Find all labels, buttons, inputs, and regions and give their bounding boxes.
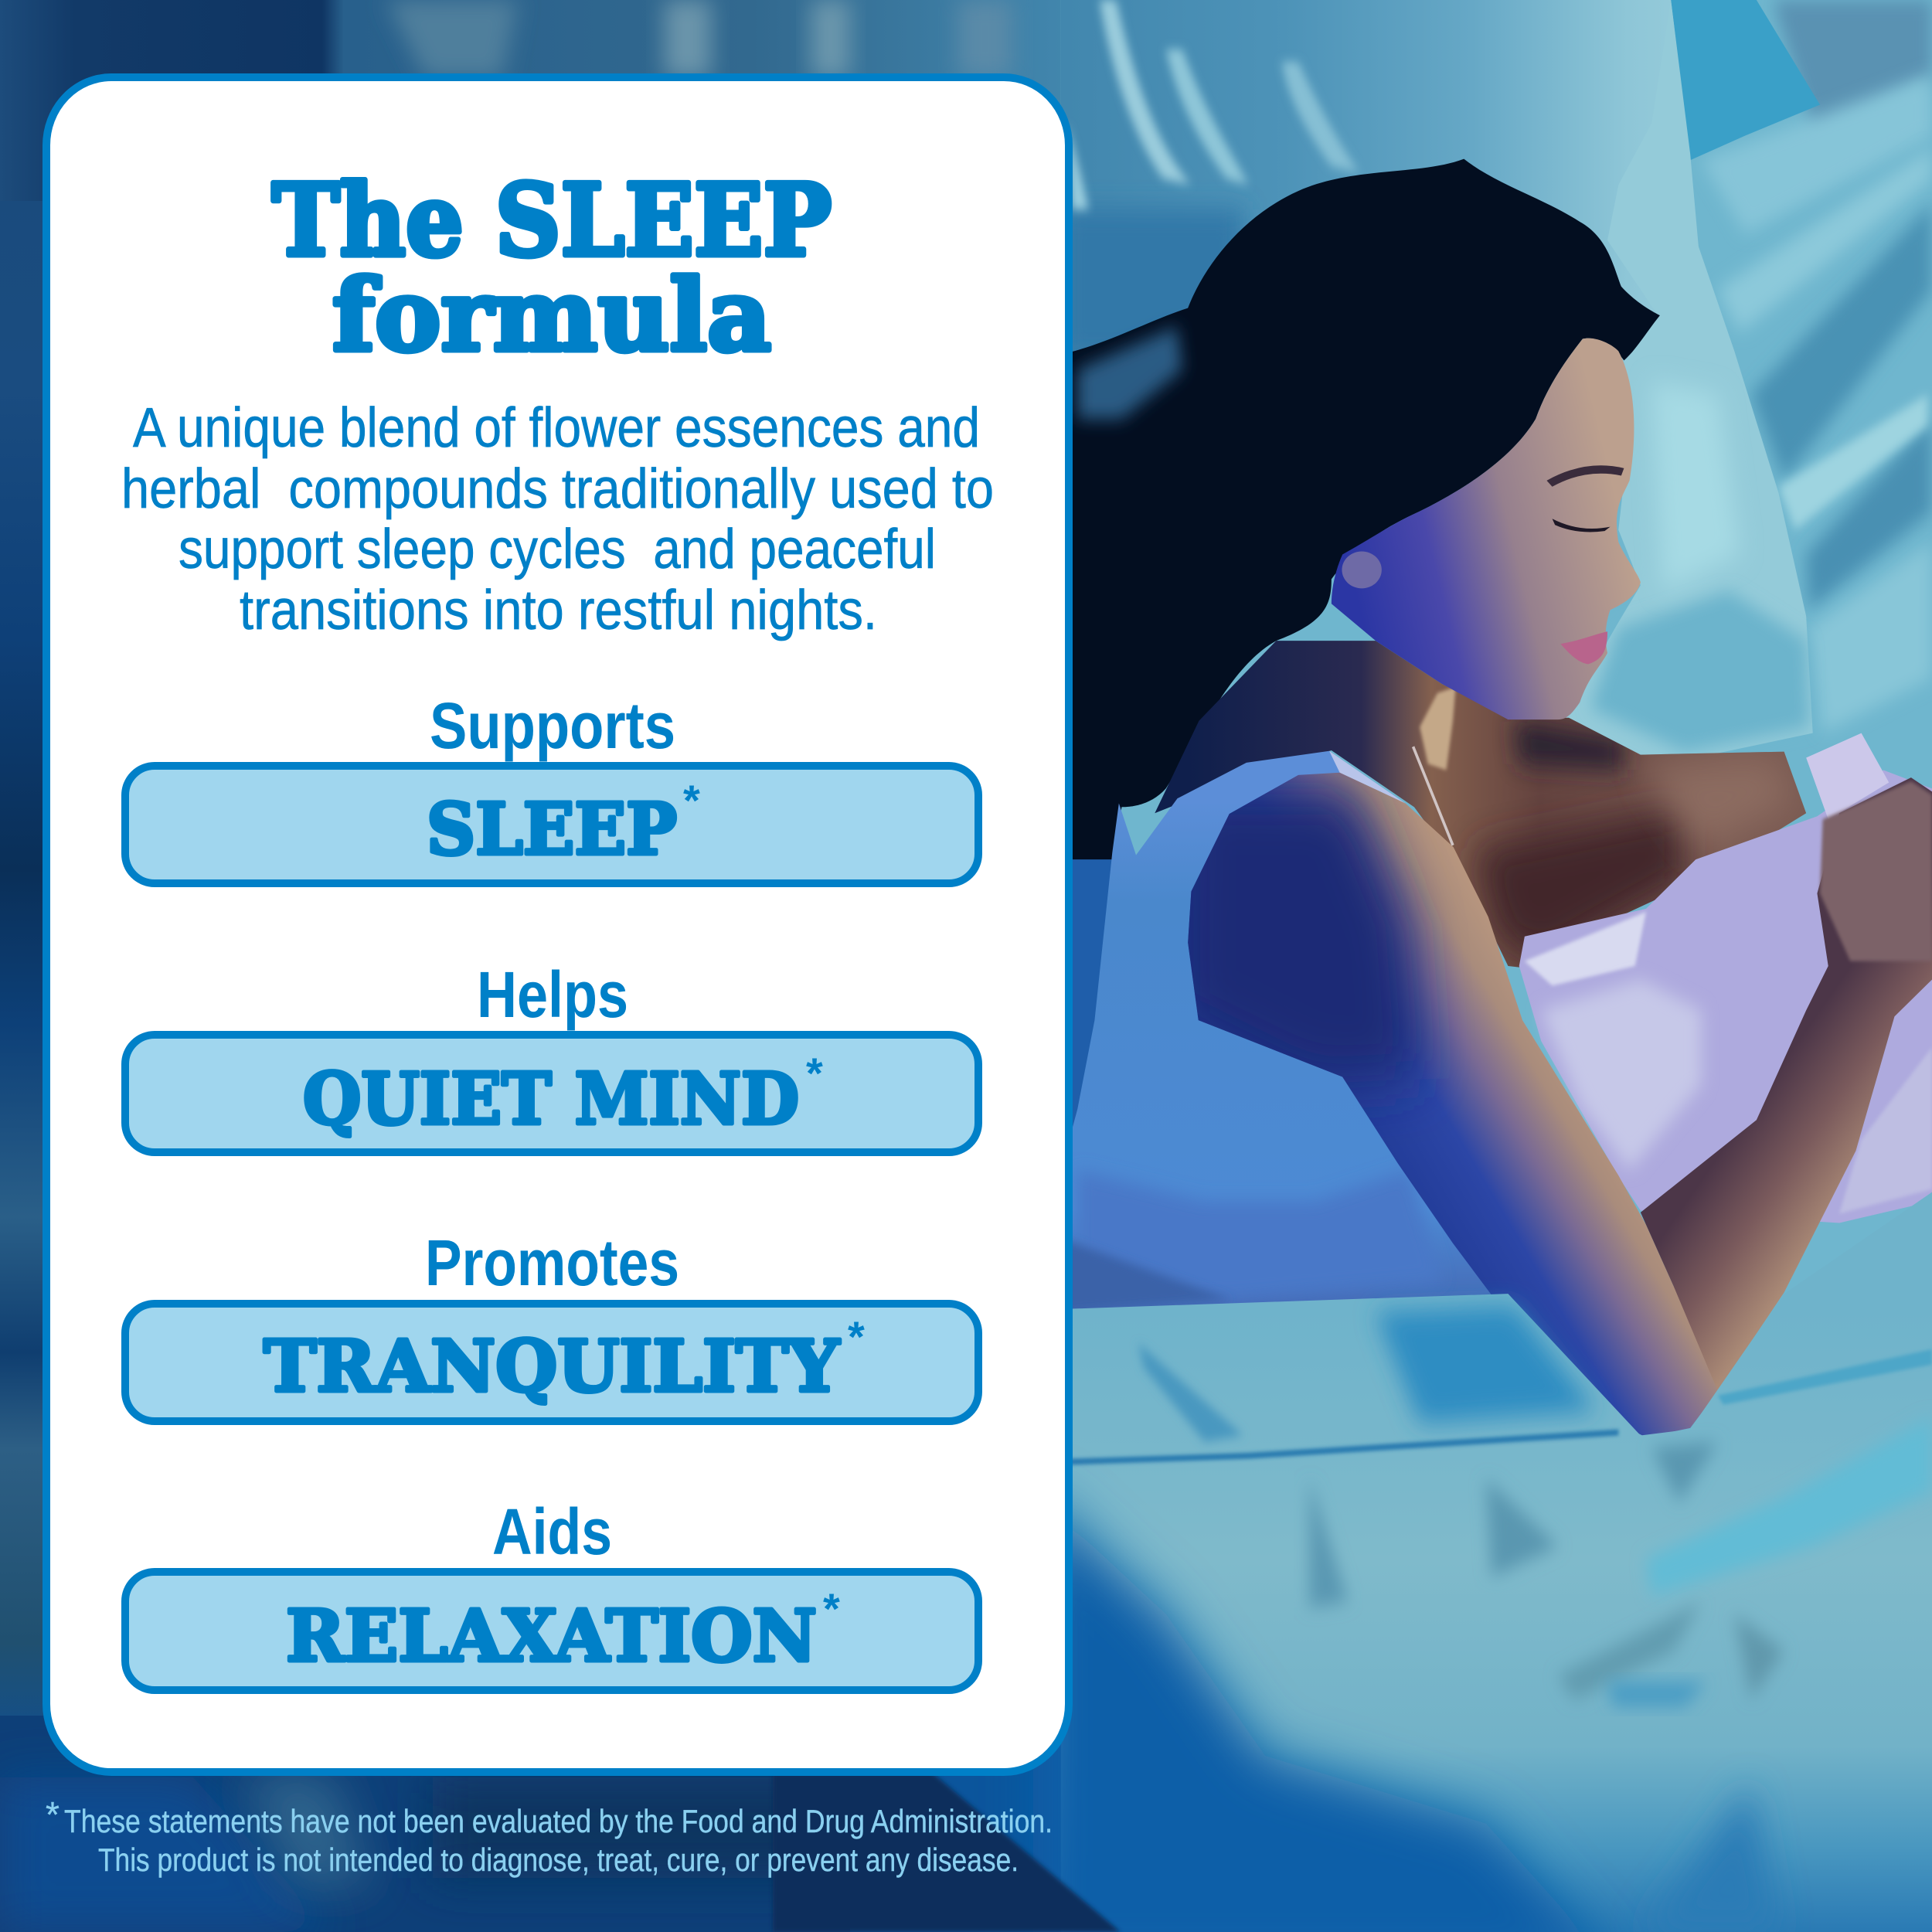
- benefit: supports sleep: Supports: [430, 689, 675, 762]
- ear: [1342, 551, 1382, 588]
- title: [272, 163, 832, 374]
- benefit: supports sleep: SLEEP: [427, 787, 677, 871]
- main pillow: [1563, 0, 1813, 759]
- benefit: helps quiet mind: QUIET MIND: [303, 1057, 799, 1141]
- benefit: supports sleep: [125, 689, 978, 883]
- benefit: aids relaxation: Aids: [492, 1495, 612, 1568]
- benefit: promotes tranquility: [125, 1226, 978, 1421]
- bed sheet right: [1061, 0, 1932, 1932]
- benefit: aids relaxation: *: [823, 1584, 840, 1633]
- dark wedge at lower left of bed: [773, 1762, 1121, 1932]
- benefit: helps quiet mind: *: [806, 1049, 823, 1097]
- face: [1332, 338, 1641, 719]
- FDA disclaimer footnote: *: [46, 1794, 60, 1835]
- FDA disclaimer footnote: These statements have not been evaluated by the Food and Drug Administration.: [64, 1803, 1053, 1839]
- benefit: aids relaxation: [125, 1495, 978, 1690]
- necklace strap: [1413, 747, 1453, 845]
- lips: [1560, 631, 1607, 664]
- description paragraph: herbal compounds traditionally used to: [121, 458, 994, 520]
- description paragraph: A unique blend of flower essences and: [133, 397, 980, 459]
- top pillow: [1061, 0, 1690, 382]
- description paragraph: [121, 397, 994, 641]
- benefit: aids relaxation: RELAXATION: [286, 1594, 817, 1678]
- benefit: supports sleep: *: [683, 776, 700, 825]
- panel: white formula card: [46, 77, 1069, 1772]
- hair: [1061, 159, 1660, 859]
- benefit: promotes tranquility: Promotes: [425, 1226, 679, 1299]
- title: formula: [332, 258, 771, 374]
- description paragraph: support sleep cycles and peaceful: [179, 519, 936, 580]
- chest and neck: [1155, 641, 1806, 968]
- description paragraph: transitions into restful nights.: [240, 580, 877, 641]
- benefit: helps quiet mind: Helps: [477, 958, 628, 1031]
- bottom strip under panel: [0, 1716, 1121, 1932]
- benefit: promotes tranquility: TRANQUILITY: [264, 1325, 840, 1408]
- white pillow under arm: [1519, 733, 1932, 1223]
- closed eye: [1553, 519, 1611, 532]
- pillow corner: [1671, 0, 1820, 160]
- benefit: helps quiet mind: [125, 958, 978, 1152]
- top sheet strip: [0, 0, 1082, 201]
- bed surface beneath panel corners: [850, 1546, 1097, 1932]
- FDA disclaimer footnote: This product is not intended to diagnose, treat, cure, or prevent any disease.: [98, 1842, 1019, 1878]
- FDA disclaimer footnote: [46, 1794, 1053, 1878]
- upper arm: [1177, 773, 1746, 1437]
- eyebrow: [1546, 465, 1624, 487]
- benefit: promotes tranquility: *: [848, 1312, 865, 1361]
- title: The SLEEP: [272, 163, 832, 279]
- right sheet folds: [1701, 0, 1932, 733]
- forearm and hand: [1641, 777, 1932, 1391]
- shadowed bedding beside tank: [1061, 850, 1121, 1196]
- collarbone highlight: [1420, 687, 1456, 770]
- blanket: [1033, 1192, 1932, 1932]
- tank top: [1061, 751, 1519, 1312]
